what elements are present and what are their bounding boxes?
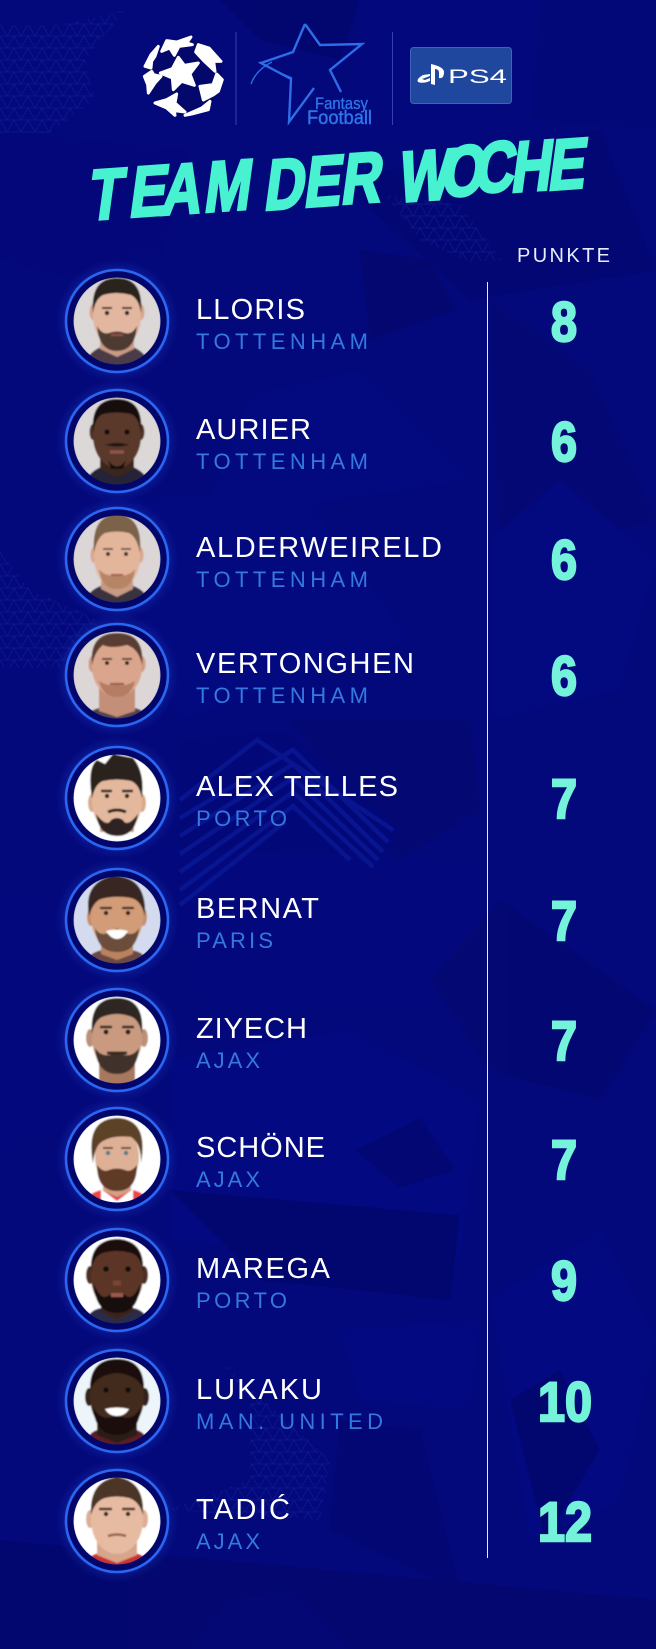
points: 7: [551, 767, 577, 830]
name: ALDERWEIRELD: [196, 532, 442, 564]
photo: Ziyech: [60, 982, 175, 1098]
points: 12: [538, 1490, 592, 1553]
row: Lukaku: [55, 1339, 592, 1463]
header logos: [144, 24, 512, 129]
row: Vertonghen: [55, 613, 577, 737]
name: VERTONGHEN: [196, 648, 414, 680]
name: TADIĆ: [196, 1493, 290, 1526]
club: MAN. UNITED: [196, 1409, 383, 1434]
club: PARIS: [196, 928, 273, 953]
title: TEAM: [82, 144, 261, 236]
photo: Alderweireld: [60, 502, 174, 616]
icon: fantasy football star: Football: [307, 108, 372, 129]
row: Alex Telles: [55, 736, 577, 860]
name: ZIYECH: [196, 1013, 307, 1045]
club: TOTTENHAM: [196, 567, 368, 592]
icon: Champions League starball: [144, 37, 222, 115]
club: AJAX: [196, 1529, 260, 1554]
title: WOCHE: [392, 123, 596, 218]
club: PORTO: [196, 806, 287, 831]
PUNKTE column heading: PUNKTE: [517, 245, 610, 267]
name: ALEX TELLES: [196, 771, 398, 803]
row: Aurier: [55, 379, 577, 503]
name: SCHÖNE: [196, 1132, 325, 1164]
name: LUKAKU: [196, 1374, 322, 1406]
divider: [392, 32, 393, 125]
row: Schöne: [55, 1097, 577, 1221]
row: Marega: [55, 1218, 577, 1342]
name: AURIER: [196, 414, 311, 446]
logo text: Fantasy: [315, 94, 368, 113]
club: TOTTENHAM: [196, 449, 368, 474]
background chevron stripes: [180, 740, 393, 905]
points: 7: [551, 1009, 577, 1072]
row: Bernat: [55, 858, 577, 982]
points: 9: [551, 1249, 577, 1312]
points: 7: [551, 1128, 577, 1191]
row: Tadić: [55, 1459, 592, 1583]
points: 6: [551, 410, 577, 473]
club: TOTTENHAM: [196, 683, 368, 708]
photo: Aurier: [60, 383, 175, 498]
row: Ziyech: [55, 978, 577, 1102]
photo: Alex Telles: [60, 740, 175, 856]
club: TOTTENHAM: [196, 329, 368, 354]
photo: Tadić: [60, 1463, 175, 1579]
icon: fantasy football star: [251, 24, 372, 129]
row: Lloris: [55, 259, 577, 383]
photo: Lukaku: [60, 1344, 175, 1458]
club: AJAX: [196, 1048, 260, 1073]
name: MAREGA: [196, 1253, 331, 1285]
points: 6: [551, 528, 577, 591]
points: 6: [551, 644, 577, 707]
club: PORTO: [196, 1288, 287, 1313]
name: BERNAT: [196, 893, 319, 925]
photo: Marega: [60, 1222, 175, 1338]
icon: PS4 badge: [410, 48, 512, 104]
photo: Lloris: [60, 263, 175, 378]
icon: PS4 badge: PS4: [448, 67, 508, 88]
points: 10: [538, 1370, 592, 1433]
photo: Schöne: [60, 1102, 174, 1216]
title: DER: [258, 137, 392, 226]
column divider: [487, 282, 488, 1558]
title: [82, 123, 596, 236]
photo: Bernat: [60, 862, 175, 978]
photo: Vertonghen: [60, 618, 174, 732]
points: 8: [551, 290, 577, 353]
club: AJAX: [196, 1167, 260, 1192]
points: 7: [551, 889, 577, 952]
row: Alderweireld: [55, 497, 577, 621]
name: LLORIS: [196, 294, 305, 326]
divider: [236, 32, 237, 125]
